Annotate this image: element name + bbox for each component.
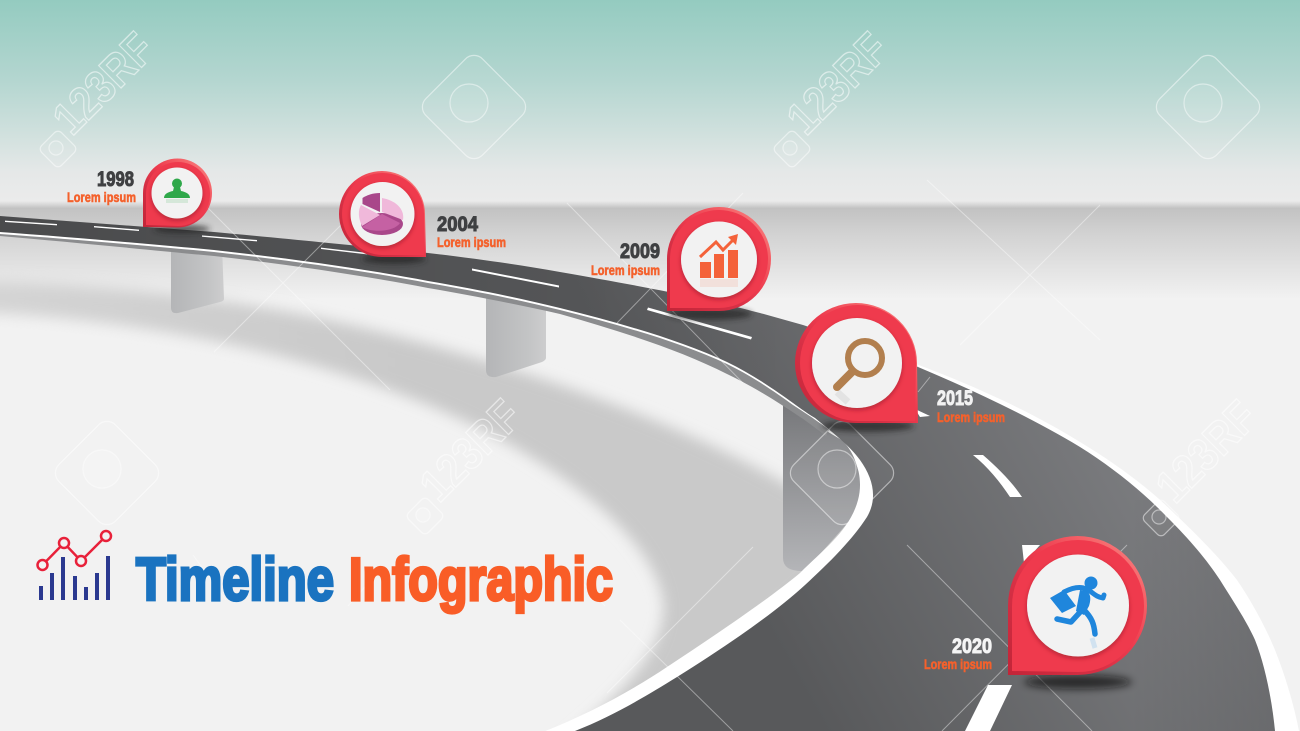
milestone 2015: Lorem ipsum xyxy=(937,409,1005,425)
lane dashes xyxy=(5,221,1040,731)
icon: pie chart xyxy=(359,193,403,235)
watermark logos: 123RF xyxy=(776,22,898,144)
milestone 2004 xyxy=(339,171,506,264)
pin xyxy=(667,207,771,311)
milestone 1998 xyxy=(67,158,212,233)
pin shadow xyxy=(362,254,426,264)
icon: bar chart with arrow xyxy=(700,234,738,287)
milestone 1998: Lorem ipsum xyxy=(67,189,136,205)
pin xyxy=(143,158,212,228)
bridge side edge xyxy=(0,232,832,436)
watermark logos: 123RF xyxy=(42,22,164,144)
road surface xyxy=(0,216,1275,731)
milestone 2004: Lorem ipsum xyxy=(437,234,506,250)
pin shadow xyxy=(822,420,914,432)
label: 2009 xyxy=(620,240,660,263)
milestone 2015 xyxy=(795,303,1005,432)
title: Timeline xyxy=(136,546,334,613)
pin shadow xyxy=(154,225,210,233)
pin shadow xyxy=(668,308,752,320)
milestone 2020 xyxy=(924,536,1147,689)
road outer white border xyxy=(916,364,1299,731)
milestone 2009: Lorem ipsum xyxy=(591,262,660,278)
pin shadow xyxy=(1024,675,1132,689)
pillar 3 xyxy=(783,405,868,571)
road xyxy=(0,200,1300,731)
pin xyxy=(339,171,426,257)
icon: running businessman xyxy=(1050,576,1104,648)
icon: title chart logo xyxy=(38,531,111,600)
title xyxy=(136,546,613,613)
watermark logos xyxy=(38,22,1267,538)
road inner white border xyxy=(0,229,875,731)
pin xyxy=(795,303,918,423)
watermark logos: 123RF xyxy=(1145,390,1267,512)
pillar 2 xyxy=(486,292,546,377)
milestone 2009 xyxy=(591,207,771,320)
label: 1998 xyxy=(97,168,134,191)
title: Infographic xyxy=(349,546,613,613)
pin xyxy=(1008,536,1147,675)
icon: person xyxy=(164,178,190,203)
watermark lines xyxy=(193,180,1127,731)
ground shadow of the bridge xyxy=(0,280,868,731)
icon: magnifier xyxy=(837,341,882,402)
label: 2020 xyxy=(952,635,992,658)
pillar 1 xyxy=(171,245,224,313)
milestone 2020: Lorem ipsum xyxy=(924,656,992,672)
watermark logos: 123RF xyxy=(409,389,531,511)
label: 2015 xyxy=(937,387,973,410)
label: 2004 xyxy=(437,213,478,236)
